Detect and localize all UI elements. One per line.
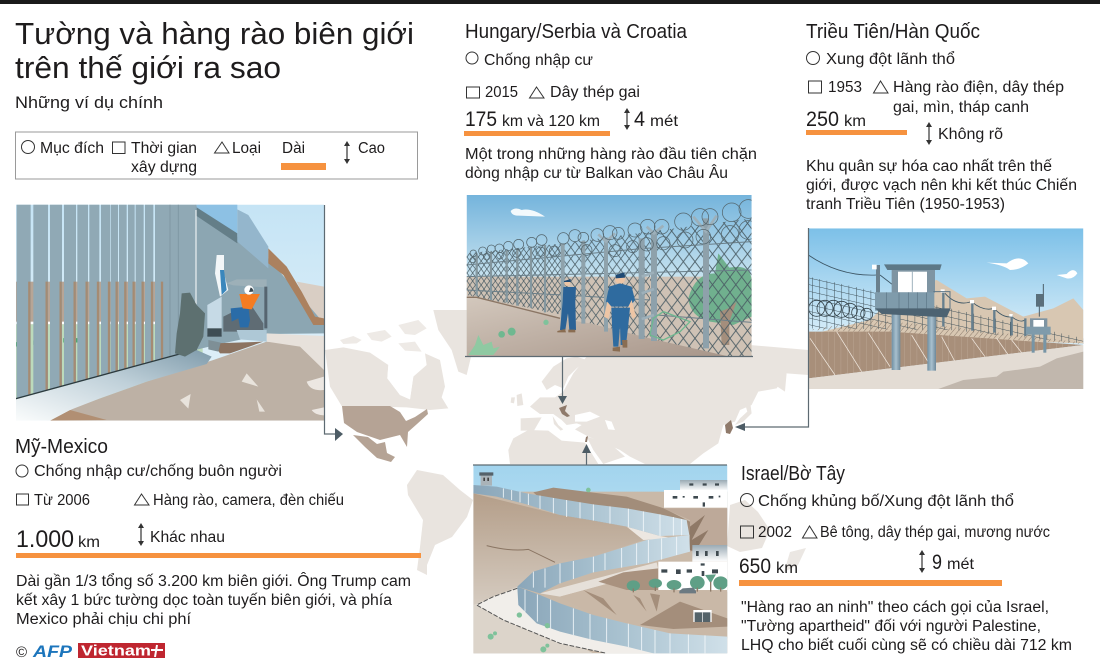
- legend: Dài: [282, 140, 305, 157]
- height: Khác nhau: [150, 529, 225, 546]
- connector arrow: Israel: [473, 444, 727, 465]
- plants: [468, 335, 500, 355]
- posts: [477, 245, 545, 312]
- small watchtower: [1026, 284, 1051, 353]
- wall segment 3: [517, 587, 727, 655]
- purpose: Chống nhập cư/chống buôn người: [34, 463, 282, 480]
- illustration: Hungary fence: [467, 195, 758, 357]
- description: dòng nhập cư từ Balkan vào Châu Âu: [465, 165, 728, 182]
- panel: Israel/Bờ Tây: [739, 463, 1072, 654]
- panel: Triều Tiên/Hàn Quốc: [806, 21, 1077, 213]
- heading: Hungary/Serbia và Croatia: [465, 21, 688, 43]
- year and type: Từ 2006: [34, 492, 90, 509]
- year and type: 1953: [828, 79, 862, 96]
- wires: [808, 255, 1025, 321]
- tunnel gate: [693, 610, 712, 622]
- fence slats: [17, 205, 197, 398]
- length: km: [844, 113, 866, 130]
- height: [919, 550, 975, 574]
- year and type: [16, 492, 344, 509]
- connector arrow: Hungary: [465, 356, 753, 404]
- mesh: [467, 243, 563, 315]
- shrubs: [488, 488, 591, 652]
- year and type: Bê tông, dây thép gai, mương nước: [820, 524, 1050, 541]
- title: Tường và hàng rào biên giới: [15, 16, 414, 51]
- description: [465, 146, 757, 182]
- height: [138, 523, 225, 546]
- length: 1.000: [16, 526, 74, 553]
- purpose: Xung đột lãnh thổ: [826, 51, 955, 68]
- legend: Mục đích: [40, 140, 104, 157]
- year and type: Dây thép gai: [550, 84, 640, 101]
- legend: Cao: [358, 140, 385, 157]
- length: km và 120 km: [502, 113, 600, 130]
- brown wall: [808, 332, 1083, 378]
- height: mét: [650, 113, 679, 130]
- description: "Tường apartheid" đối với người Palestine,: [741, 618, 1041, 635]
- United States highlighted: [342, 406, 428, 447]
- length: km: [78, 534, 100, 551]
- posts: [943, 290, 1025, 336]
- credit logos: ©: [16, 644, 27, 661]
- heading: Triều Tiên/Hàn Quốc: [806, 21, 980, 43]
- year and type: 2002: [758, 524, 792, 541]
- title: trên thế giới ra sao: [15, 50, 281, 85]
- illustration: Israel West Bank separation wall: [473, 465, 728, 655]
- top border bar: [0, 0, 1100, 4]
- length: 250: [806, 108, 839, 131]
- excavator cab: [227, 279, 267, 287]
- small guard: [557, 279, 576, 332]
- description: [16, 573, 411, 628]
- world map background: [325, 310, 808, 575]
- height: 9: [932, 551, 942, 574]
- description: Khu quân sự hóa cao nhất trên thế: [806, 158, 1052, 175]
- description: Mexico phải chịu chi phí: [16, 611, 192, 628]
- year and type: 2015: [485, 84, 518, 101]
- inner seas: [387, 365, 615, 430]
- description: giới, được vạch nên khi kết thúc Chiến: [806, 177, 1077, 194]
- heading: Mỹ-Mexico: [15, 436, 108, 458]
- Australia & New Zealand: [727, 500, 770, 552]
- purpose: Chống nhập cư: [484, 52, 593, 69]
- buildings: [680, 480, 727, 491]
- watch tower: [481, 475, 492, 486]
- connector arrow: US: [324, 205, 343, 441]
- net fence: [808, 277, 1083, 343]
- length: km: [776, 560, 798, 577]
- length: [739, 555, 1002, 586]
- title: [15, 16, 414, 85]
- description: Dài gần 1/3 tổng số 3.200 km biên giới. Ông Trump cam: [16, 573, 411, 590]
- description: kết xây 1 bức tường dọc toàn tuyến biên giới, và phía: [16, 592, 392, 609]
- concrete curb: [16, 350, 212, 421]
- year and type: Hàng rào điện, dây thép: [893, 79, 1064, 96]
- Israel highlighted: [585, 436, 588, 442]
- illustration: Korea DMZ fence and watchtowers: [808, 228, 1083, 389]
- right wall section: [195, 205, 324, 350]
- legend: Thời gian: [131, 140, 197, 157]
- length: [16, 526, 421, 558]
- length: [464, 108, 610, 136]
- tree: [688, 253, 752, 325]
- valley: [561, 584, 728, 638]
- South America: [407, 470, 473, 575]
- wall segment 2: [517, 535, 690, 593]
- ground: [467, 297, 727, 356]
- ground: [50, 342, 324, 421]
- year and type: gai, mìn, tháp canh: [893, 99, 1029, 116]
- description: "Hàng rao an ninh" theo cách gọi của Israel,: [741, 599, 1049, 616]
- description: LHQ cho biết cuối cùng sẽ có chiều dài 712 km: [741, 637, 1072, 654]
- razor wire: [470, 200, 758, 263]
- main watchtower: [872, 264, 951, 371]
- height: 4: [634, 108, 645, 131]
- connector arrow: Korea: [735, 228, 808, 431]
- excavator shadow: [175, 293, 205, 357]
- Hungary Serbia Croatia highlighted: [559, 405, 570, 417]
- legend: [16, 132, 418, 179]
- illustration: US-Mexico border wall: [16, 205, 324, 421]
- credit logos: [16, 642, 165, 661]
- panel: Mỹ-Mexico: [15, 436, 421, 628]
- legend: xây dựng: [131, 159, 197, 176]
- description: [806, 158, 1077, 213]
- Mexico highlighted: [353, 435, 395, 462]
- description: Một trong những hàng rào đầu tiên chặn: [465, 146, 757, 163]
- car: [679, 588, 696, 593]
- height: [624, 108, 679, 131]
- credit logos: Vietnam: [81, 642, 151, 660]
- year and type: [466, 84, 640, 101]
- legend: Loại: [232, 140, 261, 157]
- Korea highlighted: [725, 420, 733, 434]
- rails: [467, 242, 752, 322]
- big guard: [604, 272, 636, 352]
- subtitle: Những ví dụ chính: [15, 93, 163, 112]
- description: [741, 599, 1072, 654]
- trees: [627, 574, 728, 591]
- patrol road: [477, 588, 660, 653]
- year and type: [808, 79, 1064, 116]
- ground: [808, 345, 1083, 389]
- height: mét: [947, 556, 975, 573]
- credit logos: AFP: [32, 642, 73, 661]
- description: tranh Triều Tiên (1950-1953): [806, 196, 1005, 213]
- height: Không rõ: [938, 126, 1003, 143]
- heading: Israel/Bờ Tây: [741, 463, 845, 485]
- panel: Hungary/Serbia và Croatia: [464, 21, 757, 182]
- worker: [231, 307, 250, 327]
- inner road: [540, 562, 658, 597]
- height: [926, 122, 1003, 145]
- rocks: [180, 373, 265, 412]
- excavator arm and body: [215, 255, 228, 297]
- length: 175: [465, 108, 497, 131]
- wall segment 1: [473, 485, 689, 536]
- purpose: Chống khủng bố/Xung đột lãnh thổ: [758, 493, 1014, 510]
- length: [806, 108, 907, 135]
- length: 650: [739, 555, 771, 578]
- year and type: Hàng rào, camera, đèn chiếu: [153, 492, 344, 509]
